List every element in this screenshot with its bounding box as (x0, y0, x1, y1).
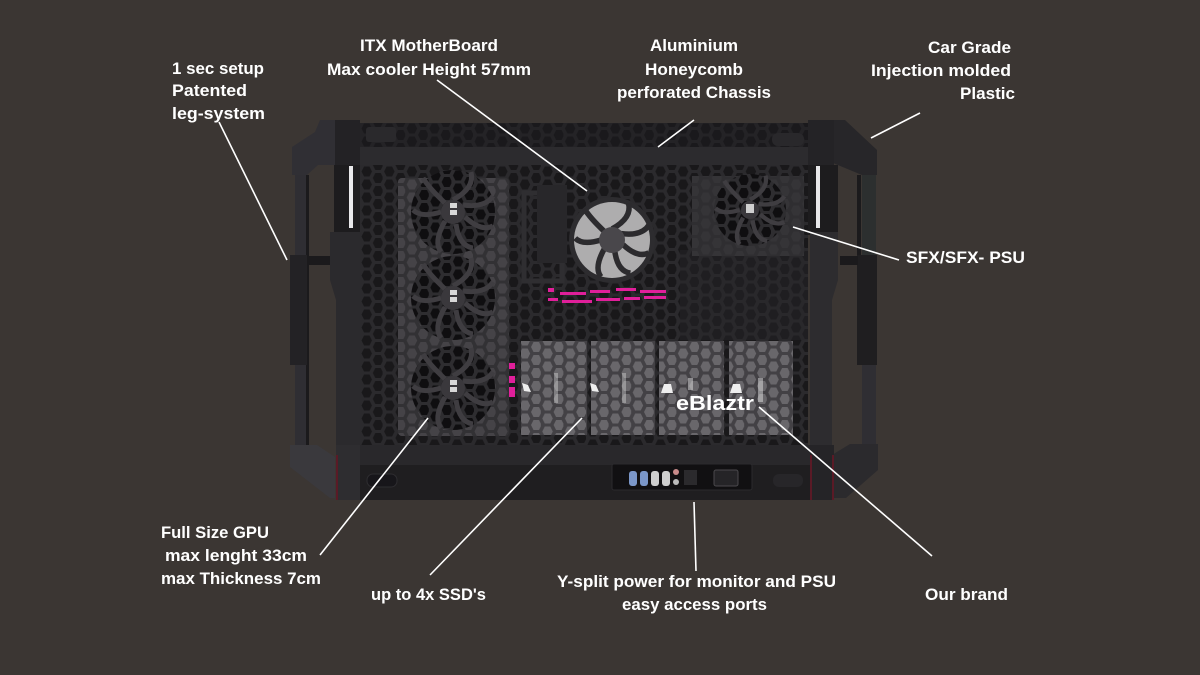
panel: front I/O ports (612, 464, 752, 490)
label: brand: Our brand (925, 585, 1008, 604)
panel: GPU with three fans (398, 170, 509, 436)
label: chassis: Honeycomb (645, 60, 743, 79)
label: plastic: Plastic (960, 84, 1015, 103)
panel: PSU fan (692, 174, 804, 256)
label: PSU: SFX/SFX- PSU (906, 248, 1025, 267)
label: leg system (172, 59, 265, 123)
leader lines (219, 80, 932, 575)
label: chassis: perforated Chassis (617, 83, 771, 102)
RAM: pink lighting (548, 288, 666, 303)
label: leg system: leg-system (172, 104, 265, 123)
label: plastic (871, 38, 1015, 103)
label: power and ports (557, 572, 836, 614)
fan: GPU fan 2 (411, 256, 495, 340)
case: chassis body (360, 123, 810, 500)
label: power and ports: easy access ports (622, 595, 767, 614)
fan: CPU cooler (574, 202, 650, 278)
label: GPU (161, 523, 321, 588)
label: GPU: max lenght 33cm (165, 546, 307, 565)
fan: GPU fan 3 (411, 346, 495, 430)
panel: motherboard with CPU cooler and RAM (524, 185, 666, 303)
label: plastic: Injection molded (871, 61, 1011, 80)
label: chassis (617, 36, 771, 102)
case: right leg system (806, 120, 878, 500)
fan: GPU fan 1 (411, 170, 495, 254)
label: chassis: Aluminium (650, 36, 738, 55)
label: motherboard (327, 36, 531, 79)
label: leg system: 1 sec setup (172, 59, 264, 78)
brand: eBlaztr: eBlaztr (676, 392, 754, 415)
panel: SSD bays (509, 341, 793, 435)
case: left leg system (290, 120, 360, 500)
label: power and ports: Y-split power for monitor and PSU (557, 572, 836, 591)
label: GPU: max Thickness 7cm (161, 569, 321, 588)
label: leg system: Patented (172, 81, 247, 100)
label: motherboard: ITX MotherBoard (360, 36, 498, 55)
label: SSD: up to 4x SSD's (371, 585, 486, 604)
label: GPU: Full Size GPU (161, 523, 269, 542)
pink lights (509, 363, 515, 397)
label: motherboard: Max cooler Height 57mm (327, 60, 531, 79)
label: plastic: Car Grade (928, 38, 1011, 57)
